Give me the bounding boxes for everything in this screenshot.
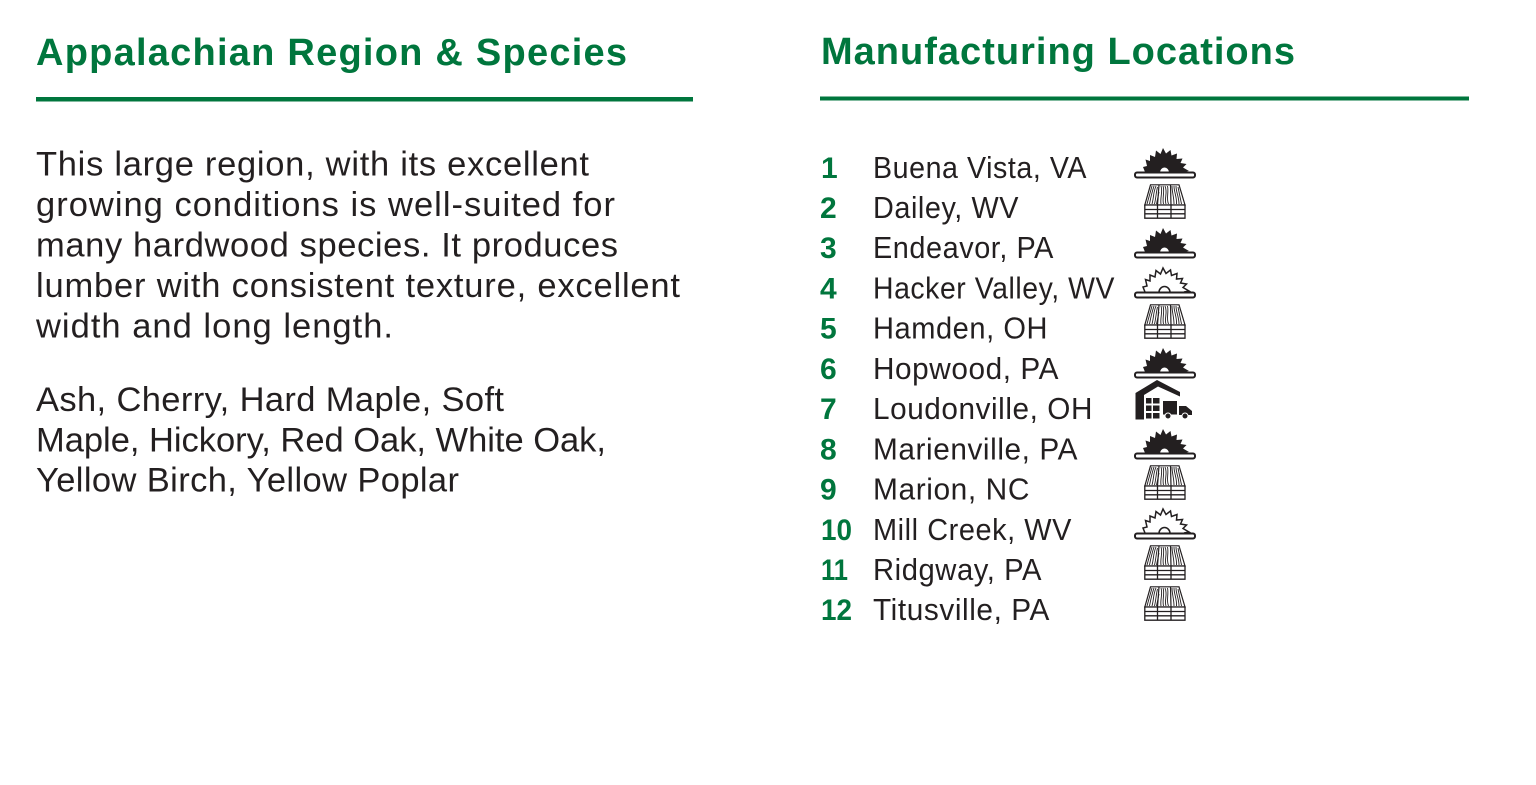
text block: region description: This large region, with its excellent [36, 146, 589, 184]
location 11: Ridgway, PA [821, 546, 1185, 587]
location 2: Dailey, WV: Dailey, WV [873, 190, 1019, 225]
text block: region description [35, 146, 680, 346]
location 10: Mill Creek, WV [821, 509, 1195, 547]
location 4: Hacker Valley, WV [820, 268, 1195, 306]
location 1: Buena Vista, VA [821, 148, 1195, 185]
text block: species list: Ash, Cherry, Hard Maple, Soft [36, 381, 504, 419]
text block: species list: Maple, Hickory, Red Oak, White Oak, [36, 422, 606, 460]
location 10: Mill Creek, WV: 10 [821, 514, 852, 547]
location 1: Buena Vista, VA: Buena Vista, VA [873, 150, 1087, 185]
location 9: Marion, NC: Marion, NC [873, 472, 1030, 506]
location 9: Marion, NC [820, 466, 1185, 506]
location 5: Hamden, OH: Hamden, OH [873, 310, 1048, 346]
location 6: Hopwood, PA: Hopwood, PA [873, 351, 1059, 386]
heading rule [820, 96, 1469, 100]
text block: region description: width and long length. [35, 308, 393, 346]
location 7: Loudonville, OH: Loudonville, OH [873, 391, 1093, 426]
location 2: Dailey, WV: 2 [820, 192, 837, 225]
location 12: Titusville, PA: Titusville, PA [873, 592, 1050, 627]
location 10: Mill Creek, WV: Mill Creek, WV [873, 512, 1072, 547]
location 3: Endeavor, PA: Endeavor, PA [873, 230, 1054, 265]
text block: species list [36, 381, 606, 500]
location 8: Marienville, PA [820, 429, 1195, 466]
location 5: Hamden, OH: 5 [820, 312, 837, 346]
location 8: Marienville, PA: Marienville, PA [873, 432, 1078, 466]
location 12: Titusville, PA [821, 587, 1185, 627]
heading: Manufacturing Locations: Manufacturing Locations [821, 31, 1295, 73]
text block: region description: many hardwood species. It produces [36, 226, 618, 264]
location 11: Ridgway, PA: 11 [821, 554, 848, 587]
icon: warehouse with truck [1136, 380, 1192, 420]
location 6: Hopwood, PA [820, 348, 1195, 386]
location 1: Buena Vista, VA: 1 [821, 152, 838, 185]
location 3: Endeavor, PA: 3 [820, 232, 837, 265]
heading rule [36, 97, 693, 102]
location 5: Hamden, OH [820, 305, 1185, 346]
location 7: Loudonville, OH: 7 [820, 393, 837, 426]
location 6: Hopwood, PA: 6 [820, 353, 837, 386]
heading: Appalachian Region & Species: Appalachian Region & Species [36, 32, 627, 74]
location 2: Dailey, WV [820, 185, 1185, 225]
location 8: Marienville, PA: 8 [820, 434, 837, 466]
text block: region description: lumber with consistent texture, excellent [36, 267, 680, 305]
location 3: Endeavor, PA [820, 228, 1195, 265]
location 9: Marion, NC: 9 [820, 474, 837, 506]
text block: species list: Yellow Birch, Yellow Poplar [36, 462, 459, 500]
location 4: Hacker Valley, WV: 4 [820, 272, 837, 306]
location 12: Titusville, PA: 12 [821, 594, 852, 627]
location 7: Loudonville, OH [820, 380, 1192, 426]
panel: Manufacturing locations [820, 31, 1469, 627]
location 4: Hacker Valley, WV: Hacker Valley, WV [873, 270, 1115, 306]
panel: Appalachian region and species [35, 32, 693, 500]
text block: region description: growing conditions is well-suited for [36, 186, 615, 224]
location 11: Ridgway, PA: Ridgway, PA [873, 552, 1042, 587]
